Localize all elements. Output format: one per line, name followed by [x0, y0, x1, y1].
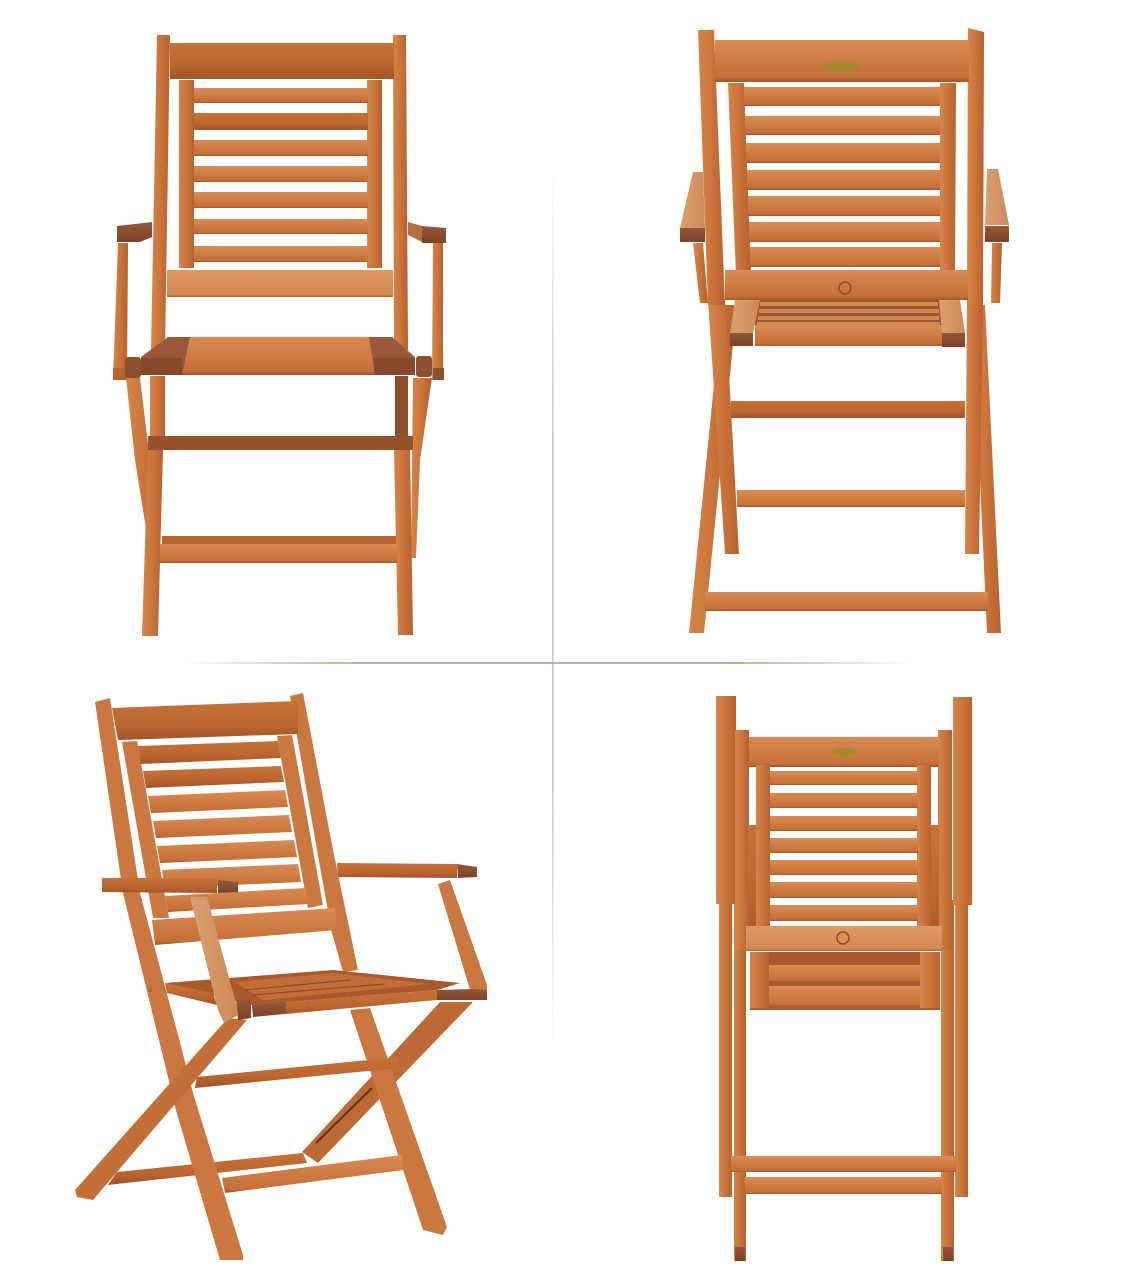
- lower back stretcher: [108, 1153, 307, 1185]
- near arm: [102, 878, 217, 893]
- seat: [165, 970, 460, 1005]
- slats: [744, 87, 940, 106]
- stretchers: [731, 1156, 956, 1172]
- logo mark: [837, 932, 849, 944]
- arms: [716, 696, 736, 904]
- slats: [770, 771, 918, 785]
- far back post: [290, 693, 358, 972]
- top rail: [715, 40, 969, 82]
- top rail: [112, 701, 298, 740]
- lower rail: [725, 270, 968, 300]
- stretchers: [148, 436, 413, 450]
- far arm support: [438, 880, 487, 1000]
- back posts: [151, 35, 170, 350]
- bolts: [148, 988, 152, 992]
- seat: [141, 337, 415, 375]
- inner legs: [734, 900, 746, 1261]
- panel: chair folded view: [716, 696, 972, 1261]
- rear legs: [150, 376, 165, 438]
- panel: chair rear view: [680, 28, 1009, 633]
- slats: [194, 88, 368, 103]
- top rail: [749, 737, 939, 767]
- far leg: [350, 1008, 447, 1235]
- slats: [138, 741, 281, 764]
- lower rail: [152, 908, 337, 945]
- seat: [755, 300, 942, 326]
- brass badge: [823, 61, 859, 73]
- arms: [117, 222, 152, 242]
- front legs: [142, 450, 163, 636]
- stiles: [756, 765, 770, 926]
- panel: chair front view: [113, 35, 446, 636]
- feet: [735, 1247, 745, 1261]
- front cross leg: [75, 1018, 247, 1200]
- crossing legs: [689, 305, 737, 633]
- lower rail: [746, 926, 942, 951]
- rear cross leg: [302, 1002, 473, 1163]
- panel: chair three-quarter view: [75, 693, 487, 1260]
- outer legs: [719, 900, 732, 1197]
- back posts: [735, 730, 749, 950]
- lower front stretcher: [222, 1155, 403, 1193]
- brass badge: [831, 748, 857, 756]
- arms: [680, 172, 705, 228]
- back posts: [698, 30, 725, 305]
- folded seat: [750, 952, 940, 1010]
- stiles: [728, 83, 751, 275]
- near post and leg: [95, 698, 243, 1260]
- near arm support: [190, 897, 238, 1023]
- arm supports: [113, 243, 128, 380]
- logo mark: [839, 282, 851, 294]
- lower rail: [167, 270, 393, 297]
- upper stretcher: [195, 1057, 398, 1088]
- far arm: [337, 863, 457, 878]
- top rail: [170, 43, 394, 79]
- stiles: [122, 741, 169, 918]
- stretchers: [731, 401, 965, 418]
- stiles: [179, 80, 194, 268]
